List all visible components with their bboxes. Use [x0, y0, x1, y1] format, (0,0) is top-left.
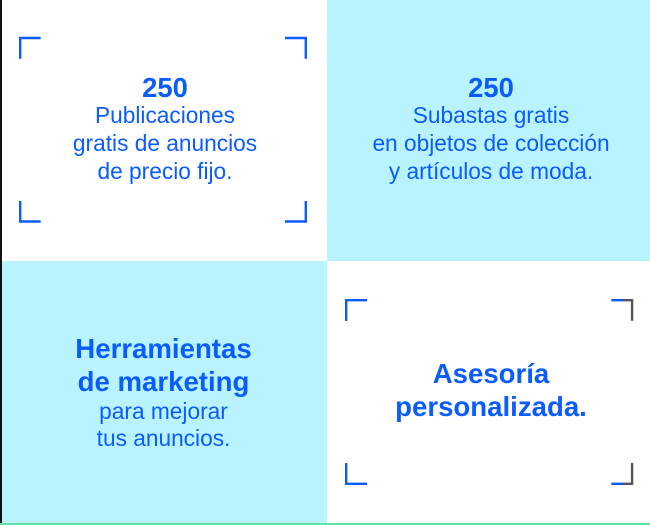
text block: asesoría personalizada [395, 358, 587, 422]
left black edge [0, 0, 2, 525]
text block: publicaciones gratis: Publicaciones [95, 102, 235, 128]
text block: publicaciones gratis: de precio fijo. [98, 158, 232, 184]
text block: publicaciones gratis: gratis de anuncios [73, 130, 257, 156]
text block: herramientas de marketing: de marketing [78, 366, 249, 397]
text block: subastas gratis [372, 72, 610, 184]
text block: herramientas de marketing: tus anuncios. [97, 425, 230, 451]
text block: subastas gratis: en objetos de colección [372, 130, 610, 156]
panel: light blue top right [327, 0, 650, 261]
text block: herramientas de marketing: Herramientas [75, 333, 252, 364]
text block: subastas gratis: y artículos de moda. [389, 158, 593, 184]
text block: subastas gratis: 250 [468, 72, 514, 103]
text block: herramientas de marketing [75, 333, 252, 451]
text block: asesoría personalizada: personalizada. [395, 391, 587, 422]
text block: subastas gratis: Subastas gratis [413, 102, 569, 128]
text block: asesoría personalizada: Asesoría [433, 358, 549, 389]
panel: light blue bottom left [2, 261, 327, 523]
text block: publicaciones gratis [73, 72, 257, 184]
text block: herramientas de marketing: para mejorar [99, 398, 228, 424]
text block: publicaciones gratis: 250 [142, 72, 188, 103]
bottom green edge [0, 523, 650, 525]
